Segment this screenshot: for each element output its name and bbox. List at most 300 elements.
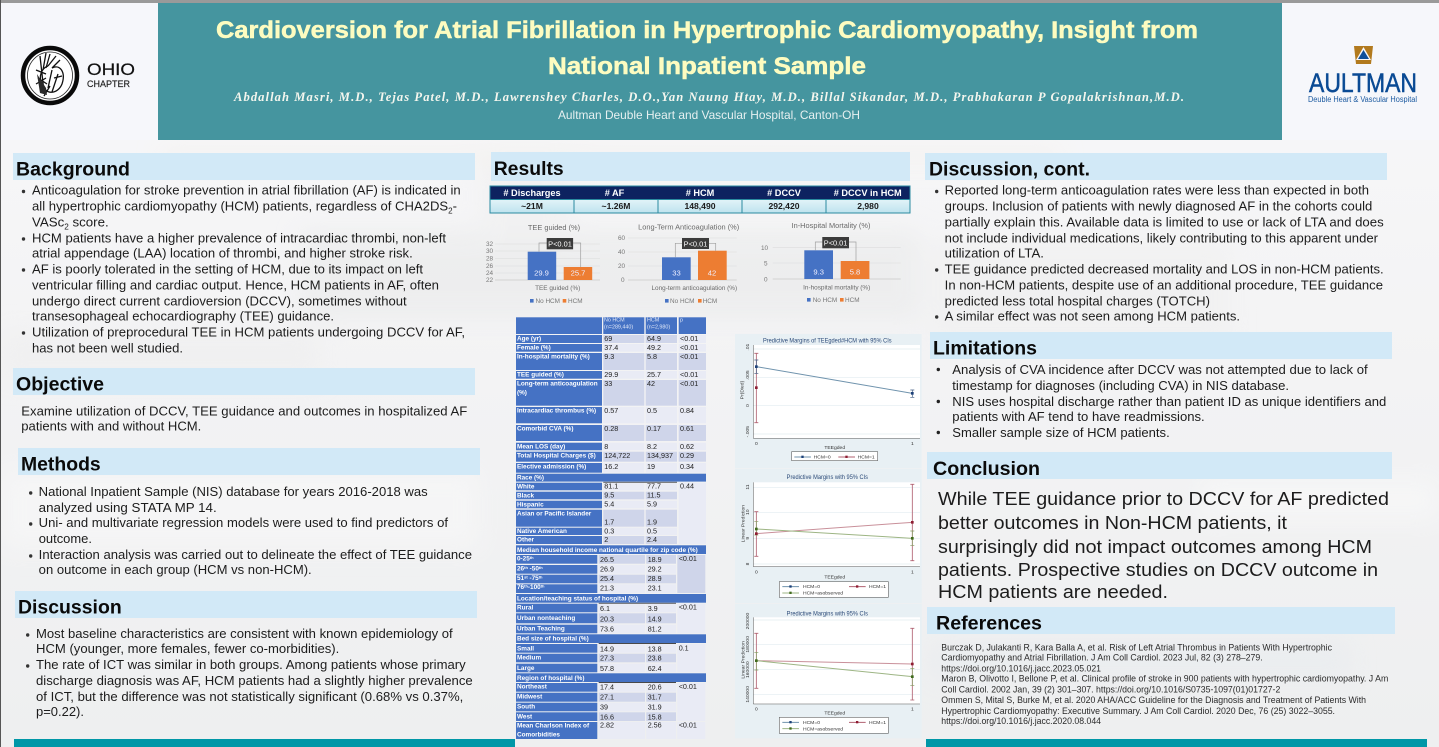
outcome rows: 37.4 <box>604 343 618 352</box>
outcome rows: <0.01 <box>680 343 698 352</box>
region rows: Midwest <box>517 694 543 701</box>
line chart: length of stay margins: Linear Prediction <box>740 505 746 542</box>
race rows: 0.5 <box>647 526 657 536</box>
text block: objective: patients with and without HCM. <box>21 418 201 433</box>
outcome rows: 42 <box>647 379 655 388</box>
bar chart: long-term anticoagulation: 0 <box>621 277 625 284</box>
household income rows: 29.2 <box>648 564 662 574</box>
footer bar left <box>14 739 515 747</box>
line chart: mortality margins: 1 <box>911 441 914 447</box>
text block: limitations bullets: Analysis of CVA incidence after DCCV was not attempted due to lack of <box>952 362 1368 377</box>
text block: discussion bullets: HCM (younger, more females, fewer co-morbidities). <box>36 641 339 656</box>
Charlson row: 2.82 <box>600 720 614 730</box>
table header row: p <box>680 318 683 324</box>
text block: discussion bullets: of ICT, but the difference was not statistically significant (0.68% vs 0.37%, <box>36 689 463 704</box>
text block: discussion bullets: discharge diagnosis was AF, HCM patients had a slightly higher prevalence <box>36 673 473 688</box>
region rows: 15.8 <box>648 712 662 722</box>
hospital location rows: <0.01 <box>679 603 697 612</box>
text block: conclusion <box>938 488 1389 602</box>
text block: objective <box>21 403 467 433</box>
heading: methods: Methods <box>21 454 101 476</box>
text block: conclusion: patients. Prospective studies on DCCV outcome in <box>938 559 1378 580</box>
household income rows: Median household income national quartile for zip code (%) <box>517 547 698 554</box>
panel: discussion <box>15 591 477 719</box>
footer bar right <box>926 739 1427 747</box>
outcome rows: 33 <box>604 379 612 388</box>
race rows: Asian or Pacific Islander <box>517 510 592 517</box>
Charlson row: <0.01 <box>679 720 697 730</box>
bed size rows: 27.3 <box>600 654 614 663</box>
household income rows: -100 <box>528 584 541 591</box>
bed size rows: 14.9 <box>600 645 614 654</box>
text block: background bullets: all hypertrophic cardiomyopathy (HCM) patients, regardless of CHA2DS <box>32 199 445 214</box>
outcome rows: 5.8 <box>647 352 657 361</box>
line chart: total charges margins: 140000 <box>745 686 751 703</box>
text block: references: https://doi.org/10.1016/j.jacc.2020.08.044 <box>941 716 1101 726</box>
text block: background bullets: 2 <box>64 222 69 231</box>
bar chart: long-term anticoagulation: Long-term anticoagulation (%) <box>651 285 737 292</box>
text block: objective: Examine utilization of DCCV, TEE guidance and outcomes in hospitalized AF <box>21 403 467 418</box>
race rows: 1.9 <box>647 517 657 526</box>
title: Cardioversion for Atrial Fibrillation in Hypertrophic Cardiomyopathy, Insight from <box>216 17 1198 44</box>
outcome rows: 8.2 <box>647 442 657 451</box>
text block: discussion bullets <box>26 626 473 719</box>
line chart: length of stay margins: 11 <box>745 484 751 490</box>
outcome rows: 64.9 <box>647 334 661 343</box>
hospital location rows <box>516 594 706 634</box>
text block: references: Cardiomyopathy and Atrial Fibrillation. J Am Coll Cardiol. 2023 Jul, 82 (3) 278–279. <box>941 653 1263 663</box>
hospital location rows: 20.3 <box>600 615 614 624</box>
summary table: # Discharges <box>503 188 561 198</box>
panel: references <box>927 607 1395 726</box>
authors: Abdallah Masri, M.D., Tejas Patel, M.D., Lawrenshey Charles, D.O.,Yan Naung Htay, M.D., Billal Sikandar, M.D., Prabhakaran P Gopalakrishnan,M.D. <box>233 90 1184 104</box>
text block: discussion continued bullets: Reported long-term anticoagulation rates were less than expected in both <box>945 183 1369 198</box>
bar chart: long-term anticoagulation: 33 <box>672 268 681 278</box>
region rows: 31.9 <box>648 702 662 712</box>
line chart: mortality margins: Pr(Died) <box>740 380 746 399</box>
bar chart: long-term anticoagulation: 40 <box>618 249 626 256</box>
text block: conclusion: surprisingly did not impact outcomes among HCM <box>938 536 1372 557</box>
household income rows: 18.9 <box>648 555 662 564</box>
hospital location rows: Rural <box>517 605 534 612</box>
region rows: Northeast <box>517 684 548 691</box>
text block: background bullets: 2 <box>448 207 453 216</box>
hospital location rows: Urban nonteaching <box>517 615 575 622</box>
text block: discussion continued bullets: utilization of LTA. <box>945 245 1044 260</box>
outcome rows: 0.57 <box>604 406 618 415</box>
hospital location rows: 3.9 <box>648 604 658 613</box>
logo: Ohio chapter: OHIO <box>87 60 135 79</box>
text block: limitations bullets: NIS uses hospital discharge rather than patient ID as unique identifiers and <box>952 394 1386 409</box>
bed size rows: Bed size of hospital (%) <box>517 636 589 643</box>
text block: references <box>941 643 1389 726</box>
text block: background bullets: transesophageal echocardiography (TEE) guidance. <box>32 308 334 323</box>
household income rows: 26.9 <box>600 564 614 574</box>
bar chart: TEE guided <box>486 223 600 305</box>
bar chart: long-term anticoagulation: 42 <box>708 268 716 278</box>
table header row <box>516 317 706 334</box>
Charlson row <box>516 720 705 739</box>
bed size rows: Large <box>517 665 535 672</box>
outcome rows: Total Hospital Charges ($) <box>517 453 596 460</box>
text block: discussion continued bullets: A similar effect was not seen among HCM patients. <box>945 308 1240 323</box>
household income rows: 23.1 <box>648 583 662 592</box>
heading: discussion: Discussion <box>18 597 122 619</box>
outcome rows: Long-term anticoagulation <box>517 381 598 388</box>
household income rows: 21.3 <box>600 583 614 592</box>
region rows: 27.1 <box>600 692 614 702</box>
affiliation: Aultman Deuble Heart and Vascular Hospital, Canton-OH <box>558 108 860 122</box>
text block: methods bullets: Uni- and multivariate regression models were used to find predictors of <box>39 515 448 530</box>
household income rows: 28.9 <box>648 574 662 583</box>
bar chart: TEE guided: TEE guided (%) <box>528 223 580 232</box>
outcome rows: 0.84 <box>680 406 694 415</box>
household income rows: 26.5 <box>600 555 614 564</box>
bar chart: TEE guided: No HCM <box>536 298 560 305</box>
table header row: (n=2,980) <box>647 324 670 330</box>
bar chart: in-hospital mortality: 5.8 <box>850 268 860 276</box>
outcome rows: Age (yr) <box>517 336 541 343</box>
household income rows: -50 <box>528 566 539 572</box>
bar chart: in-hospital mortality: In-Hospital Mortality (%) <box>792 221 870 230</box>
text block: discussion continued bullets: groups. Inclusion of patients with newly diagnosed AF in the cohorts could <box>945 199 1372 214</box>
outcome rows: 0.28 <box>604 424 618 433</box>
text block: limitations bullets: patients with AF tend to have readmissions. <box>952 409 1205 424</box>
line chart: total charges margins: 180000 <box>745 636 751 653</box>
text block: limitations bullets <box>937 362 1386 440</box>
summary table: ~1.26M <box>602 201 630 211</box>
household income rows: st <box>524 574 528 580</box>
summary table: # HCM <box>686 188 715 198</box>
line chart: total charges margins: Predictive Margins with 95% CIs <box>787 610 868 617</box>
line chart: total charges margins: HCM=1 <box>869 720 886 726</box>
hospital location rows: 6.1 <box>600 604 610 613</box>
line chart: mortality margins: .005 <box>745 370 751 380</box>
outcome rows: 134,937 <box>647 451 673 460</box>
line chart: mortality margins: .01 <box>745 344 751 351</box>
line chart: mortality margins: HCM=0 <box>814 454 831 460</box>
panel: discussion continued <box>925 153 1387 323</box>
outcome rows: Elective admission (%) <box>517 464 586 471</box>
hospital location rows: Location/teaching status of hospital (%) <box>517 595 638 602</box>
race rows: Hispanic <box>517 501 544 508</box>
bar chart: TEE guided: 30 <box>486 248 494 255</box>
line chart: total charges margins: HCM=0 <box>803 720 820 726</box>
text block: discussion continued bullets <box>935 183 1384 323</box>
region rows: 17.4 <box>600 682 614 692</box>
outcome rows: 25.7 <box>647 370 661 379</box>
text block: background bullets <box>22 183 465 355</box>
text block: discussion bullets: Most baseline characteristics are consistent with known epidemiology of <box>36 626 453 641</box>
bar chart: TEE guided: 28 <box>486 256 494 262</box>
outcome rows: 0.17 <box>647 424 661 433</box>
outcome rows: 9.3 <box>604 352 614 361</box>
summary table: ~21M <box>521 201 543 211</box>
bed size rows: 23.8 <box>648 654 662 663</box>
line chart: mortality margins: 0 <box>745 404 751 407</box>
text block: methods bullets: analyzed using STATA MP 14. <box>39 500 217 515</box>
table header row: (n=289,440) <box>604 324 633 330</box>
line chart: length of stay margins: HCM=asobserved <box>803 591 843 597</box>
bar chart: in-hospital mortality: 5 <box>764 260 768 268</box>
line chart: mortality margins <box>735 334 922 468</box>
title <box>216 17 1198 80</box>
line chart: mortality margins: Predictive Margins of TEEgded#HCM with 95% CIs <box>763 338 892 345</box>
outcome rows: <0.01 <box>680 334 698 343</box>
text block: discussion bullets: p=0.22). <box>36 704 84 719</box>
text block: background bullets: score. <box>69 214 109 229</box>
bar chart: TEE guided: 29.9 <box>534 268 549 278</box>
summary table: 148,490 <box>684 201 716 211</box>
logo: Ohio chapter: CHAPTER <box>87 79 130 89</box>
region rows <box>516 673 706 722</box>
logo: Aultman: AULTMAN <box>1309 68 1417 98</box>
outcome rows: Intracardiac thrombus (%) <box>517 408 596 415</box>
text block: references: Maron B, Olivotto I, Bellone P, et al. Clinical profile of stroke in 900 patients with hypertrophic cardiomyopathy. J Am <box>941 674 1389 684</box>
bar chart: long-term anticoagulation: 60 <box>618 235 626 242</box>
line chart: mortality margins: TEEgded <box>824 445 845 451</box>
outcome rows <box>516 334 706 473</box>
household income rows <box>516 545 706 593</box>
line chart: length of stay margins: TEEgded <box>824 575 845 581</box>
text block: background bullets: Anticoagulation for stroke prevention in atrial fibrillation (AF) is indicated in <box>32 183 461 198</box>
bar chart: in-hospital mortality: HCM <box>845 297 860 304</box>
bar chart: TEE guided: TEE guided (%) <box>535 285 580 292</box>
panel: objective <box>13 368 475 433</box>
baseline characteristics table <box>516 317 706 739</box>
race rows <box>516 474 706 544</box>
household income rows: th <box>524 584 528 588</box>
text block: discussion continued bullets: predicted less total hospital charges (TOTCH) <box>945 293 1210 308</box>
heading: limitations: Limitations <box>933 337 1037 359</box>
bar chart: TEE guided: 32 <box>486 241 494 248</box>
outcome rows: 0.29 <box>680 451 694 460</box>
line chart: total charges margins: 160000 <box>745 661 751 678</box>
outcome rows: 29.9 <box>604 370 618 379</box>
line chart: length of stay margins: 1 <box>911 569 914 575</box>
panel: methods <box>18 448 480 577</box>
text block: methods bullets: outcome. <box>39 531 92 546</box>
summary table: 2,980 <box>857 201 879 211</box>
region rows: 39 <box>600 702 608 712</box>
text block: references: Coll Cardiol. 2002 Jan, 39 (2) 301–307. https://doi.org/10.1016/S0735-1097(01)01727-2 <box>941 685 1280 695</box>
bar chart: long-term anticoagulation <box>618 222 739 305</box>
region rows: West <box>517 713 533 720</box>
summary table: 292,420 <box>768 201 800 211</box>
heading: objective: Objective <box>16 374 104 396</box>
outcome rows: <0.01 <box>680 379 698 388</box>
race rows: 2.4 <box>647 535 657 544</box>
panel: results <box>486 152 910 305</box>
outcome rows: 69 <box>604 334 612 343</box>
line chart: length of stay margins: HCM=0 <box>803 584 820 590</box>
region rows: 31.7 <box>648 692 662 702</box>
text block: background bullets: - <box>453 199 457 214</box>
bar chart: long-term anticoagulation: HCM <box>703 298 717 305</box>
Charlson row: Mean Charlson Index of <box>517 723 590 730</box>
line chart: mortality margins: HCM=1 <box>858 454 875 460</box>
outcome rows: <0.01 <box>680 352 698 361</box>
bar chart: long-term anticoagulation: P<0.01 <box>684 240 707 248</box>
text block: background bullets: undergo direct current cardioversion (DCCV), sometimes without <box>32 293 407 308</box>
bed size rows: Medium <box>517 655 541 662</box>
hospital location rows: 81.2 <box>648 625 662 634</box>
text block: methods bullets: on outcome in each group (HCM vs non-HCM). <box>39 562 312 577</box>
text block: background bullets: AF is poorly tolerated in the setting of HCM, due to its impact on left <box>32 261 423 276</box>
outcome rows: 0.61 <box>680 424 694 433</box>
logo: Ohio chapter <box>23 48 135 103</box>
text block: limitations bullets: timestamp for diagnoses (including CVA) in NIS database. <box>952 378 1289 393</box>
line chart: length of stay margins: 8 <box>745 562 751 565</box>
text block: background bullets: has not been well studied. <box>32 340 183 355</box>
region rows: 16.6 <box>600 712 614 722</box>
household income rows: 25.4 <box>600 574 614 583</box>
summary table <box>490 186 910 213</box>
race rows: 9.5 <box>604 490 614 500</box>
heading: results: Results <box>494 158 564 180</box>
bar chart: long-term anticoagulation: Long-Term Anticoagulation (%) <box>638 222 739 231</box>
line chart: total charges margins: TEEgded <box>824 710 845 716</box>
bed size rows <box>516 634 706 673</box>
bar chart: TEE guided: 24 <box>486 270 494 277</box>
line chart: total charges margins <box>735 604 922 738</box>
line chart: total charges margins: Linear Prediction <box>740 641 746 679</box>
Charlson row: 2.56 <box>648 720 662 730</box>
region rows: Region of hospital (%) <box>517 675 584 682</box>
race rows: Black <box>517 492 534 499</box>
Charlson row: Comorbidities <box>517 732 560 739</box>
household income rows: <0.01 <box>679 554 697 563</box>
race rows: 81.1 <box>604 482 618 490</box>
household income rows: -75 <box>528 575 539 582</box>
household income rows: 0-25 <box>517 556 530 562</box>
race rows: 11.5 <box>647 490 660 500</box>
text block: conclusion: HCM patients are needed. <box>938 581 1168 602</box>
text block: conclusion: While TEE guidance prior to DCCV for AF predicted <box>938 488 1389 509</box>
text block: discussion continued bullets: TEE guidance predicted decreased mortality and LOS in non-HCM patients. <box>945 261 1384 276</box>
race rows: White <box>517 483 535 490</box>
text block: discussion continued bullets: partially explain this. Available data is limited to use or lack of LTA and does <box>945 214 1384 229</box>
bar chart: in-hospital mortality: No HCM <box>813 297 837 304</box>
text block: conclusion: better outcomes in Non-HCM patients, it <box>938 512 1287 533</box>
text block: background bullets: HCM patients have a higher prevalence of intracardiac thrombi, non-left <box>32 230 446 245</box>
bar chart: TEE guided: P<0.01 <box>548 240 572 248</box>
panel: limitations <box>930 332 1392 440</box>
bar chart: in-hospital mortality <box>761 221 901 304</box>
line chart: mortality margins: -.005 <box>745 426 751 437</box>
line chart: length of stay margins: 9 <box>745 537 751 540</box>
text block: background bullets: VASc <box>32 214 64 229</box>
text block: background bullets: ventricular filling and cardiac output. Hence, HCM patients in AF, often <box>32 277 439 292</box>
bed size rows: 57.8 <box>600 664 614 673</box>
logo: Aultman <box>1308 46 1417 104</box>
line chart: total charges margins: HCM=asobserved <box>803 726 843 732</box>
bar chart: TEE guided: 22 <box>486 277 494 284</box>
panel: conclusion <box>927 452 1392 602</box>
bed size rows: 62.4 <box>648 664 662 673</box>
heading: conclusion: Conclusion <box>933 458 1040 480</box>
line chart: total charges margins: 1 <box>911 706 914 712</box>
table header row: HCM <box>647 318 660 324</box>
region rows: South <box>517 704 535 711</box>
race rows: 0.44 <box>680 482 694 490</box>
text block: methods bullets: Interaction analysis was carried out to delineate the effect of TEE guidance <box>39 547 472 562</box>
race rows: Other <box>517 537 535 544</box>
bed size rows: Small <box>517 646 534 653</box>
heading: discussion continued: Discussion, cont. <box>929 159 1090 181</box>
logo: Aultman: Deuble Heart & Vascular Hospital <box>1308 95 1417 104</box>
line chart: length of stay margins: HCM=1 <box>869 584 886 590</box>
outcome rows: Female (%) <box>517 345 551 352</box>
outcome rows: TEE guided (%) <box>517 372 564 379</box>
bar chart: in-hospital mortality: 9.3 <box>813 268 824 276</box>
race rows: 1.7 <box>604 517 614 526</box>
heading: background: Background <box>16 159 130 181</box>
race rows: 2 <box>604 535 608 544</box>
line chart: length of stay margins: 10 <box>745 509 751 515</box>
bar chart: in-hospital mortality: 0 <box>764 276 768 284</box>
line chart: length of stay margins: Predictive Margins with 95% CIs <box>787 474 868 481</box>
text block: references: Ommen S, Mital S, Burke M, et al. 2020 AHA/ACC Guideline for the Diagnosis and Treatment of Patients With <box>941 695 1366 705</box>
bar chart: TEE guided: 26 <box>486 263 494 270</box>
text block: discussion continued bullets: not include individual medications, likely contributing to this apparent under <box>945 230 1379 245</box>
bar chart: long-term anticoagulation: 20 <box>618 263 626 270</box>
outcome rows: Comorbid CVA (%) <box>517 426 573 433</box>
outcome rows: 8 <box>604 442 608 451</box>
text block: limitations bullets: Smaller sample size of HCM patients. <box>952 425 1170 440</box>
outcome rows: In-hospital mortality (%) <box>517 354 590 361</box>
race rows: Race (%) <box>517 474 544 481</box>
outcome rows: 0.62 <box>680 442 694 451</box>
race rows: 5.9 <box>647 500 657 508</box>
outcome rows: 49.2 <box>647 343 661 352</box>
household income rows: th <box>539 574 543 580</box>
text block: methods bullets <box>29 484 472 577</box>
text block: background bullets: Utilization of preprocedural TEE in HCM patients undergoing DCCV for AF, <box>32 324 465 339</box>
household income rows: th <box>539 565 543 570</box>
title: National Inpatient Sample <box>548 53 866 80</box>
bar chart: TEE guided: 25.7 <box>571 268 585 278</box>
outcome rows: 0.5 <box>647 406 657 415</box>
text block: discussion bullets: The rate of ICT was similar in both groups. Among patients whose primary <box>36 657 466 672</box>
text block: references: https://doi.org/10.1016/j.jacc.2023.05.021 <box>941 664 1101 674</box>
outcome rows: Mean LOS (day) <box>517 444 565 451</box>
summary table: # AF <box>605 188 625 198</box>
text block: references: Burczak D, Julakanti R, Kara Balla A, et al. Risk of Left Atrial Thrombus in Patients With Hypertrophic <box>941 643 1332 653</box>
bar chart: TEE guided: HCM <box>568 298 583 305</box>
summary table: # DCCV <box>767 188 802 198</box>
line chart: length of stay margins: 0 <box>755 569 758 575</box>
bar chart: in-hospital mortality: 10 <box>761 245 769 252</box>
race rows: 77.7 <box>647 482 661 490</box>
panel: background <box>13 153 475 355</box>
line chart: length of stay margins <box>735 469 922 603</box>
region rows: 20.6 <box>648 682 662 692</box>
bed size rows: 13.8 <box>648 645 662 654</box>
household income rows: th <box>541 584 545 588</box>
household income rows: 26 <box>517 566 524 572</box>
text block: methods bullets: National Inpatient Sample (NIS) database for years 2016-2018 was <box>39 484 428 499</box>
household income rows: 51 <box>517 575 524 582</box>
household income rows: th <box>530 555 534 560</box>
heading: references: References <box>936 612 1042 634</box>
line chart: total charges margins: 0 <box>755 706 758 712</box>
bed size rows: 0.1 <box>679 644 689 652</box>
household income rows: th <box>524 565 528 570</box>
race rows: Native American <box>517 528 567 535</box>
line chart: mortality margins: 0 <box>755 441 758 447</box>
household income rows: 76 <box>517 584 524 591</box>
